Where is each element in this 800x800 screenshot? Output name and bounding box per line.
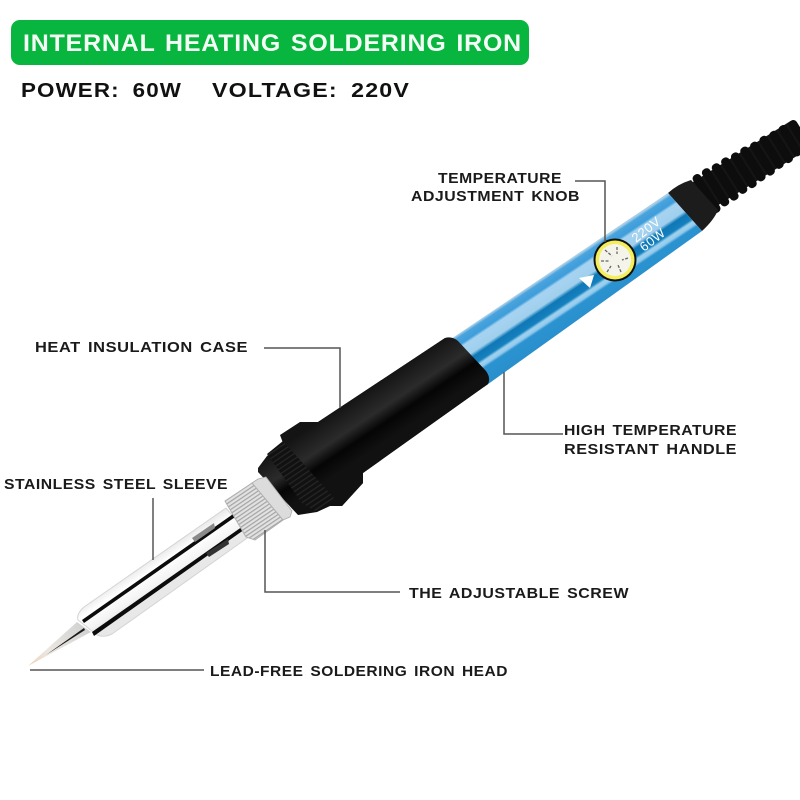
callout: temperature adjustment knob: ADJUSTMENT KNOB bbox=[411, 188, 580, 205]
callout: stainless steel sleeve: STAINLESS STEEL SLEEVE bbox=[4, 476, 228, 493]
callout: high temperature resistant handle: RESISTANT HANDLE bbox=[564, 441, 737, 458]
callout: heat insulation case bbox=[35, 339, 340, 408]
callout: temperature adjustment knob: TEMPERATURE bbox=[438, 170, 562, 187]
callout: heat insulation case: HEAT INSULATION CASE bbox=[35, 339, 248, 356]
temperature knob bbox=[594, 238, 636, 282]
handle rating text: 220V bbox=[629, 214, 663, 245]
stainless steel sleeve bbox=[78, 508, 250, 636]
callout: lead-free soldering iron head: LEAD-FREE SOLDERING IRON HEAD bbox=[210, 663, 508, 680]
lead-free tip bbox=[28, 622, 91, 666]
callout: the adjustable screw bbox=[265, 530, 629, 602]
insulation body overlay bbox=[288, 338, 488, 506]
title banner: INTERNAL HEATING SOLDERING IRON bbox=[23, 30, 522, 57]
handle rating text bbox=[629, 214, 668, 254]
ribbed ring bbox=[267, 441, 334, 512]
power cable strain relief bbox=[668, 114, 800, 231]
silver collar bbox=[252, 477, 292, 520]
callout: high temperature resistant handle: HIGH TEMPERATURE bbox=[564, 422, 737, 439]
heat insulation case bbox=[258, 337, 489, 515]
handle arrow mark bbox=[579, 275, 594, 288]
specifications line: POWER: 60W bbox=[21, 80, 182, 102]
callout: temperature adjustment knob bbox=[411, 170, 605, 242]
soldering iron illustration bbox=[28, 114, 800, 666]
title banner bbox=[11, 20, 529, 65]
callout: high temperature resistant handle bbox=[504, 372, 737, 458]
adjustable knurled screw bbox=[225, 483, 283, 540]
specifications line bbox=[21, 80, 410, 102]
handle rating text: 60W bbox=[637, 225, 668, 254]
callout: the adjustable screw: THE ADJUSTABLE SCREW bbox=[409, 585, 629, 602]
blue handle bbox=[445, 193, 702, 387]
specifications line: VOLTAGE: 220V bbox=[212, 80, 410, 102]
